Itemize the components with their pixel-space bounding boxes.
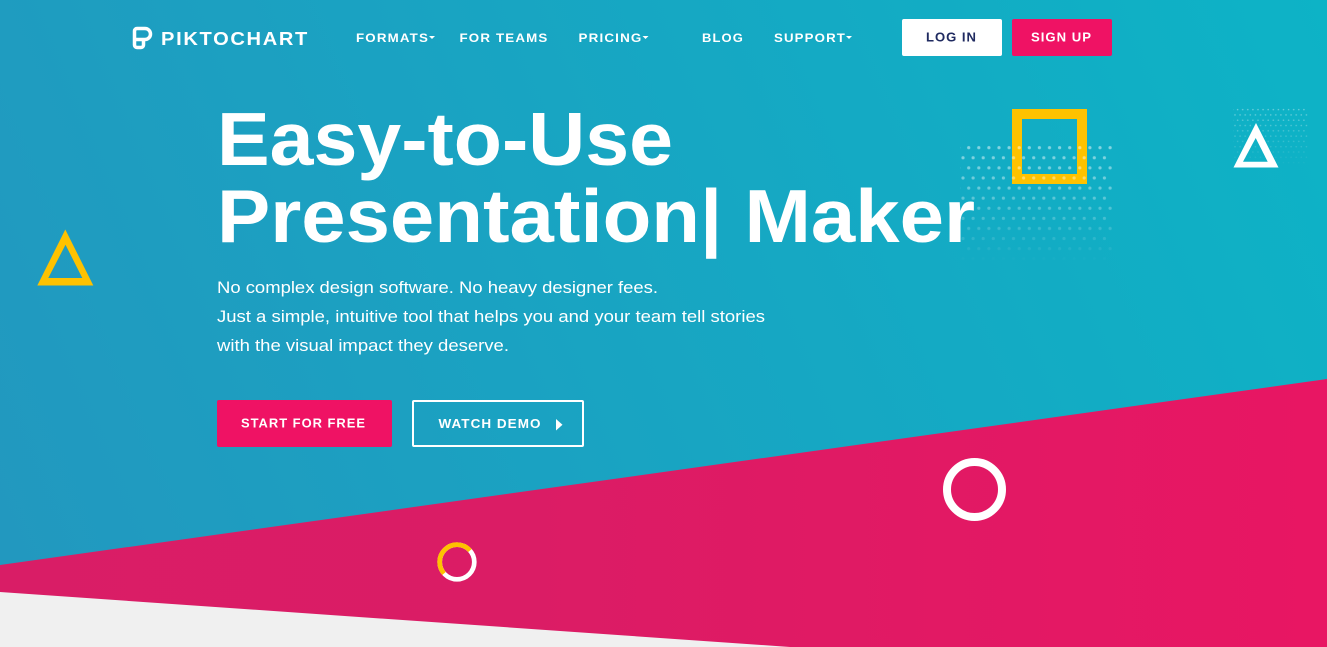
button: log in bbox=[902, 19, 1002, 56]
button: start for free bbox=[217, 400, 392, 447]
nav: for teams: FOR TEAMS bbox=[460, 33, 548, 45]
grey bottom wedge bbox=[0, 592, 790, 647]
navigation bbox=[356, 33, 852, 45]
nav: support caret bbox=[846, 36, 852, 39]
subheading text: Just a simple, intuitive tool that helps you and your team tell stories bbox=[217, 307, 765, 326]
icon: logo mark bbox=[134, 28, 151, 48]
button: watch demo bbox=[413, 401, 583, 446]
logo bbox=[134, 28, 309, 49]
heading: Presentation| Maker bbox=[217, 174, 975, 259]
nav: formats caret bbox=[429, 36, 435, 39]
button: sign up: SIGN UP bbox=[1031, 30, 1092, 44]
nav: support: SUPPORT bbox=[774, 33, 846, 45]
heading bbox=[217, 97, 975, 259]
subheading text: No complex design software. No heavy designer fees. bbox=[217, 278, 658, 297]
dot pattern: centre bbox=[960, 146, 1112, 250]
pink diagonal band bbox=[0, 379, 1327, 647]
icon: yellow triangle bbox=[37, 230, 93, 286]
subheading text: with the visual impact they deserve. bbox=[216, 336, 509, 355]
button: watch demo: WATCH DEMO bbox=[438, 416, 542, 431]
logo wordmark: PIKTOCHART bbox=[161, 29, 309, 49]
icon: white circle bbox=[947, 462, 1002, 517]
icon: yellow square bbox=[1017, 114, 1082, 179]
nav: pricing caret bbox=[642, 36, 648, 39]
icon: white triangle bbox=[1234, 123, 1278, 168]
nav: pricing: PRICING bbox=[578, 33, 642, 45]
button: sign up bbox=[1012, 19, 1112, 56]
icon: yellow and white ring bbox=[440, 545, 474, 579]
button: log in: LOG IN bbox=[926, 30, 977, 44]
dot pattern: right bbox=[1233, 108, 1308, 163]
heading: Easy-to-Use bbox=[217, 97, 673, 181]
subheading text bbox=[216, 278, 765, 355]
button: start for free: START FOR FREE bbox=[241, 416, 366, 430]
nav: blog: BLOG bbox=[702, 33, 744, 45]
nav: formats: FORMATS bbox=[356, 33, 429, 45]
